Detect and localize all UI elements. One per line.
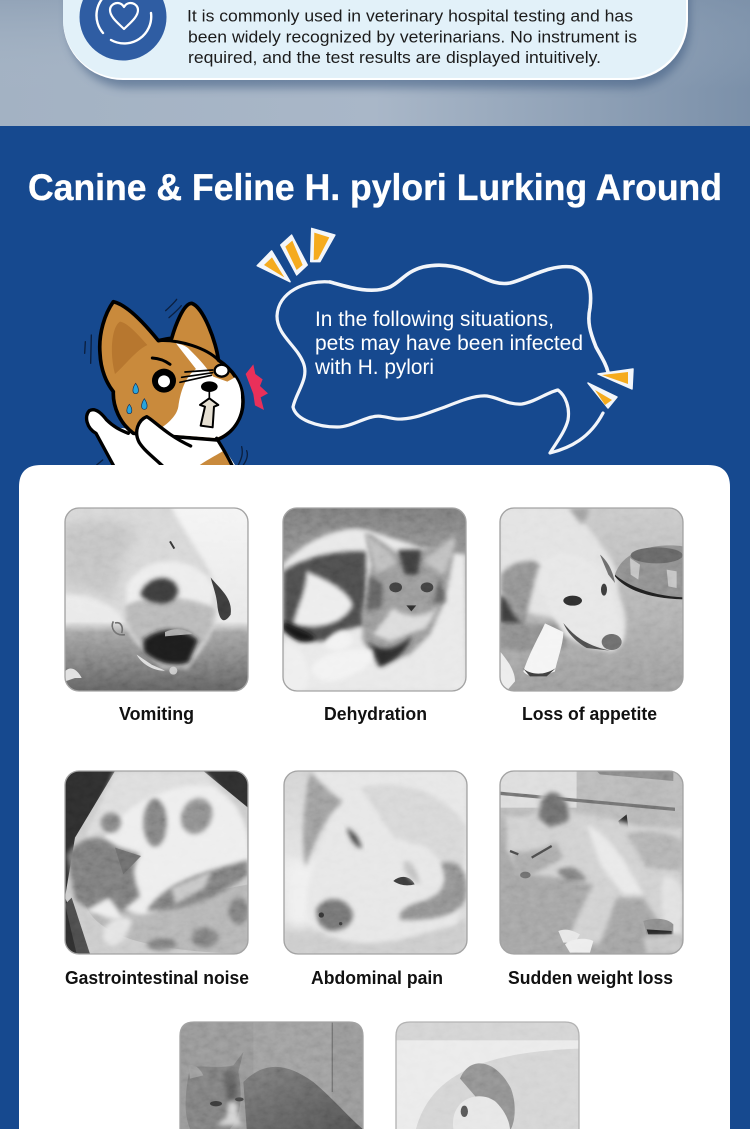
info text: been widely recognized by veterinarians. No instrument is bbox=[188, 28, 637, 46]
mascot nose and mouth bbox=[200, 381, 218, 427]
photo: kitten in blanket bbox=[283, 508, 466, 691]
photo: fluffy puppy bbox=[396, 1022, 579, 1129]
photo: tired labrador bbox=[284, 771, 467, 954]
speech bubble bbox=[277, 265, 608, 453]
label: Gastrointestinal noise: Gastrointestinal noise bbox=[65, 968, 249, 988]
sweat drops bbox=[127, 383, 147, 414]
label: Loss of appetite: Loss of appetite bbox=[522, 704, 657, 724]
label: Sudden weight loss: Sudden weight loss bbox=[508, 968, 673, 988]
bubble text: pets may have been infected bbox=[315, 332, 583, 355]
label: Abdominal pain: Abdominal pain bbox=[311, 968, 443, 988]
photo: dog with food bowl bbox=[498, 506, 683, 691]
icon: red burst bbox=[246, 364, 268, 410]
photo: thin stray cat bbox=[500, 771, 683, 954]
label: Dehydration: Dehydration bbox=[324, 704, 427, 724]
mascot: startled corgi bbox=[85, 299, 247, 468]
mascot eyes and brow bbox=[152, 358, 229, 393]
white card panel bbox=[19, 465, 730, 1129]
photo: grey tabby cat bbox=[180, 1022, 363, 1129]
mascot head bbox=[100, 302, 243, 440]
icon: heart badge bbox=[80, 0, 166, 60]
title: Canine & Feline H. pylori Lurking Around bbox=[28, 167, 722, 208]
info text: It is commonly used in veterinary hospital testing and has bbox=[187, 6, 633, 26]
info text bbox=[187, 6, 637, 67]
mascot hands bbox=[87, 410, 233, 468]
photo: cat on mesh mat bbox=[65, 771, 250, 954]
bubble text: In the following situations, bbox=[315, 308, 554, 331]
bubble text: with H. pylori bbox=[314, 356, 434, 379]
info pill panel bbox=[63, 0, 690, 88]
info text: required, and the test results are displayed intuitively. bbox=[188, 48, 601, 67]
icon: exclamation marks top bbox=[257, 228, 335, 282]
icon: exclamation marks right bbox=[588, 369, 633, 408]
mascot body bbox=[120, 428, 235, 465]
bubble text bbox=[314, 308, 583, 379]
shake lines bbox=[85, 299, 247, 465]
label: Vomiting: Vomiting bbox=[119, 704, 194, 724]
photo: vomiting dog bbox=[62, 505, 248, 691]
top banner background bbox=[0, 0, 750, 126]
